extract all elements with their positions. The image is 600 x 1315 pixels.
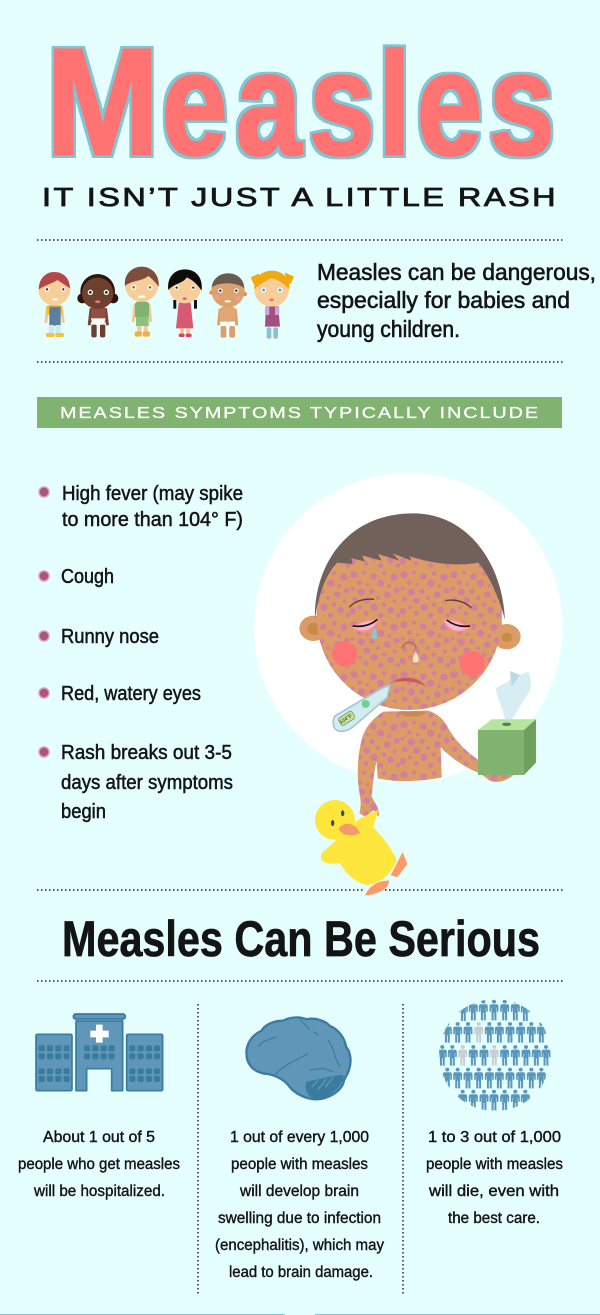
title: easles — [162, 22, 555, 186]
text: hospitalization: will be hospitalized. — [33, 1183, 165, 1200]
text: hospitalization: people who get measles — [18, 1156, 180, 1173]
nose and drip — [402, 642, 419, 663]
hair — [315, 513, 505, 620]
bullet: rash: Rash breaks out 3-5 — [61, 742, 232, 764]
text: deaths — [426, 1129, 563, 1227]
child 3: green shirt — [125, 267, 159, 337]
text: hospitalization: About 1 out of 5 — [43, 1129, 155, 1146]
rubber duck — [315, 800, 407, 896]
bullet: rash: begin — [61, 801, 106, 823]
text: encephalitis: (encephalitis), which may — [215, 1237, 384, 1254]
symptoms list — [39, 483, 243, 823]
thermometer: 104°F — [338, 713, 354, 726]
text: hospitalization — [18, 1129, 180, 1200]
illustration: six children — [38, 267, 294, 339]
intro text: young children. — [317, 316, 460, 342]
icon: hospital — [36, 1014, 163, 1091]
intro text: especially for babies and — [317, 287, 570, 313]
child 4: black pigtails, pink dress — [168, 269, 202, 337]
ears — [299, 616, 521, 649]
intro text — [317, 259, 596, 342]
thermometer — [333, 685, 390, 731]
icon: people in circle — [438, 1000, 550, 1110]
text: deaths: 1 to 3 out of 1,000 — [428, 1129, 561, 1146]
bullet: runny nose: Runny nose — [61, 626, 159, 648]
illustration: sick boy — [254, 473, 563, 896]
text: deaths: people with measles — [426, 1156, 563, 1173]
bullet: cough: Cough — [61, 566, 114, 588]
text: deaths: will die, even with — [428, 1183, 559, 1200]
bullet: rash — [39, 742, 233, 823]
banner: symptoms heading: MEASLES SYMPTOMS TYPICALLY INCLUDE — [60, 405, 540, 422]
title: M — [46, 16, 159, 187]
bullet: red, watery eyes: Red, watery eyes — [61, 683, 201, 705]
eyes, brows and tear — [349, 599, 471, 639]
bullet: high fever — [39, 483, 243, 531]
frowning mouth — [390, 677, 427, 687]
text: encephalitis: 1 out of every 1,000 — [230, 1129, 369, 1146]
bullet: cough — [39, 566, 114, 588]
text: encephalitis: swelling due to infection — [218, 1210, 381, 1227]
torso and arms — [358, 711, 513, 817]
bullet: high fever: to more than 104° F) — [62, 509, 243, 531]
text: encephalitis — [215, 1129, 384, 1281]
white circle backdrop — [254, 473, 563, 782]
text: encephalitis: people with measles — [231, 1156, 368, 1173]
child 1: red hair, overalls — [38, 272, 70, 337]
child 6: blonde pigtails, purple dress — [251, 271, 294, 339]
subtitle: IT ISN’T JUST A LITTLE RASH — [42, 182, 558, 212]
intro text: Measles can be dangerous, — [317, 259, 596, 285]
bullet: high fever: High fever (may spike — [62, 483, 243, 505]
red cheeks — [332, 641, 485, 676]
text: encephalitis: lead to brain damage. — [229, 1264, 373, 1281]
child 5: tan skin, diaper — [209, 273, 247, 338]
text: encephalitis: will develop brain — [239, 1183, 359, 1200]
icon: brain — [246, 1017, 351, 1099]
bullet: rash: days after symptoms — [61, 772, 233, 794]
banner: symptoms heading — [37, 397, 562, 428]
text: deaths: the best care. — [448, 1210, 540, 1227]
tissue box — [478, 671, 536, 775]
face — [317, 523, 502, 717]
child 2: dark skin, diaper — [77, 274, 118, 337]
